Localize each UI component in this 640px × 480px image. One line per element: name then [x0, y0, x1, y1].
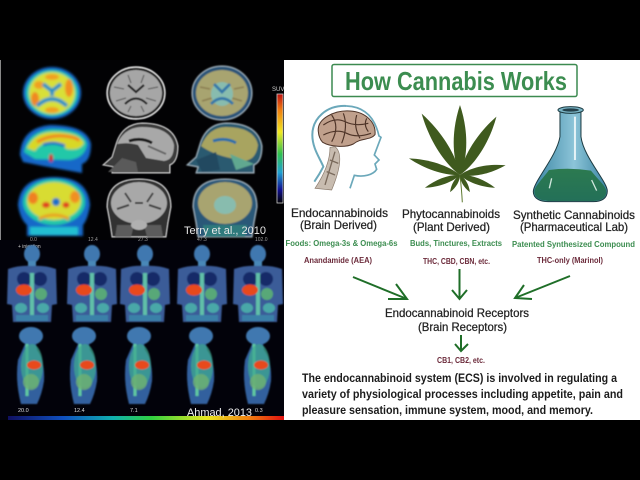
time labels: [30, 237, 268, 243]
side body scans: [17, 327, 271, 404]
receptors heading: (Brain Receptors): [418, 320, 507, 334]
MRI row 3: coronal: [107, 179, 171, 237]
description paragraph: pleasure sensation, immune system, mood, and memory.: [302, 403, 593, 417]
column: endocannabinoids: Endocannabinoids: [291, 206, 388, 220]
icon: flask: [533, 107, 607, 202]
panel: brain PET and MRI scans: [0, 60, 284, 240]
scale values: 12.4: [74, 408, 85, 414]
column: endocannabinoids: Anandamide (AEA): [304, 256, 372, 265]
front body scans: [7, 245, 283, 322]
scale values: 20.0: [18, 408, 29, 414]
PET scan row 2: sagittal: [20, 125, 91, 173]
description paragraph: [302, 371, 623, 417]
time labels: 27.3: [138, 237, 148, 243]
receptors heading: Endocannabinoid Receptors: [385, 306, 529, 320]
time labels: 102.0: [255, 237, 268, 243]
column: phytocannabinoids: Phytocannabinoids: [402, 207, 500, 221]
icon: cannabis leaf: [408, 105, 506, 202]
time labels: 12.4: [88, 237, 98, 243]
panel: whole-body PET scans: [0, 237, 284, 420]
PET scan row 3: coronal: [18, 177, 90, 236]
title: How Cannabis Works: [345, 66, 567, 96]
column: phytocannabinoids: Buds, Tinctures, Extracts: [410, 239, 503, 248]
arrow: endocannabinoids to receptors: [353, 277, 407, 299]
time labels: 0.0: [30, 237, 37, 243]
PET scan row 1: axial: [23, 67, 81, 119]
column: phytocannabinoids: THC, CBD, CBN, etc.: [423, 257, 490, 266]
overlay row 3: coronal: [193, 179, 257, 237]
citation: Terry et al.: Terry et al., 2010: [184, 225, 266, 237]
column: synthetic cannabinoids: [512, 208, 635, 265]
SUV colour scale: SUV: [272, 87, 284, 93]
SUV colour scale: [272, 87, 284, 203]
column: endocannabinoids: [286, 206, 398, 265]
receptor types: CB1, CB2, etc.: [437, 356, 485, 365]
scale values: [18, 408, 263, 414]
arrow: synthetic cannabinoids to receptors: [515, 276, 570, 299]
colour bar: [8, 416, 284, 420]
MRI row 1: axial: [107, 67, 165, 119]
column: synthetic cannabinoids: Synthetic Cannabinoids: [513, 208, 635, 222]
overlay row 2: sagittal: [187, 123, 262, 173]
scale values: 7.1: [130, 408, 138, 414]
column: synthetic cannabinoids: Patented Synthesized Compound: [512, 240, 635, 249]
column: phytocannabinoids: (Plant Derived): [413, 220, 490, 234]
receptors heading: [385, 306, 529, 334]
column: synthetic cannabinoids: THC-only (Marinol): [537, 256, 603, 265]
arrow: receptors to CB1 CB2: [455, 335, 468, 351]
column: synthetic cannabinoids: (Pharmaceutical Lab): [520, 220, 628, 234]
citation: Ahmad: Ahmad, 2013: [187, 407, 252, 419]
MRI row 2: sagittal: [103, 123, 178, 173]
time labels: 47.3: [197, 237, 207, 243]
column: endocannabinoids: Foods: Omega-3s & Omega-6s: [286, 239, 398, 248]
icon: head with brain: [312, 106, 381, 190]
column: endocannabinoids: (Brain Derived): [300, 218, 377, 232]
scale values: 0.3: [255, 408, 263, 414]
overlay row 1: axial: [192, 66, 252, 120]
column: phytocannabinoids: [402, 207, 503, 266]
injection label: + injection: [18, 244, 41, 250]
arrow: phytocannabinoids to receptors: [452, 269, 467, 299]
panel: How Cannabis Works: [284, 60, 640, 420]
